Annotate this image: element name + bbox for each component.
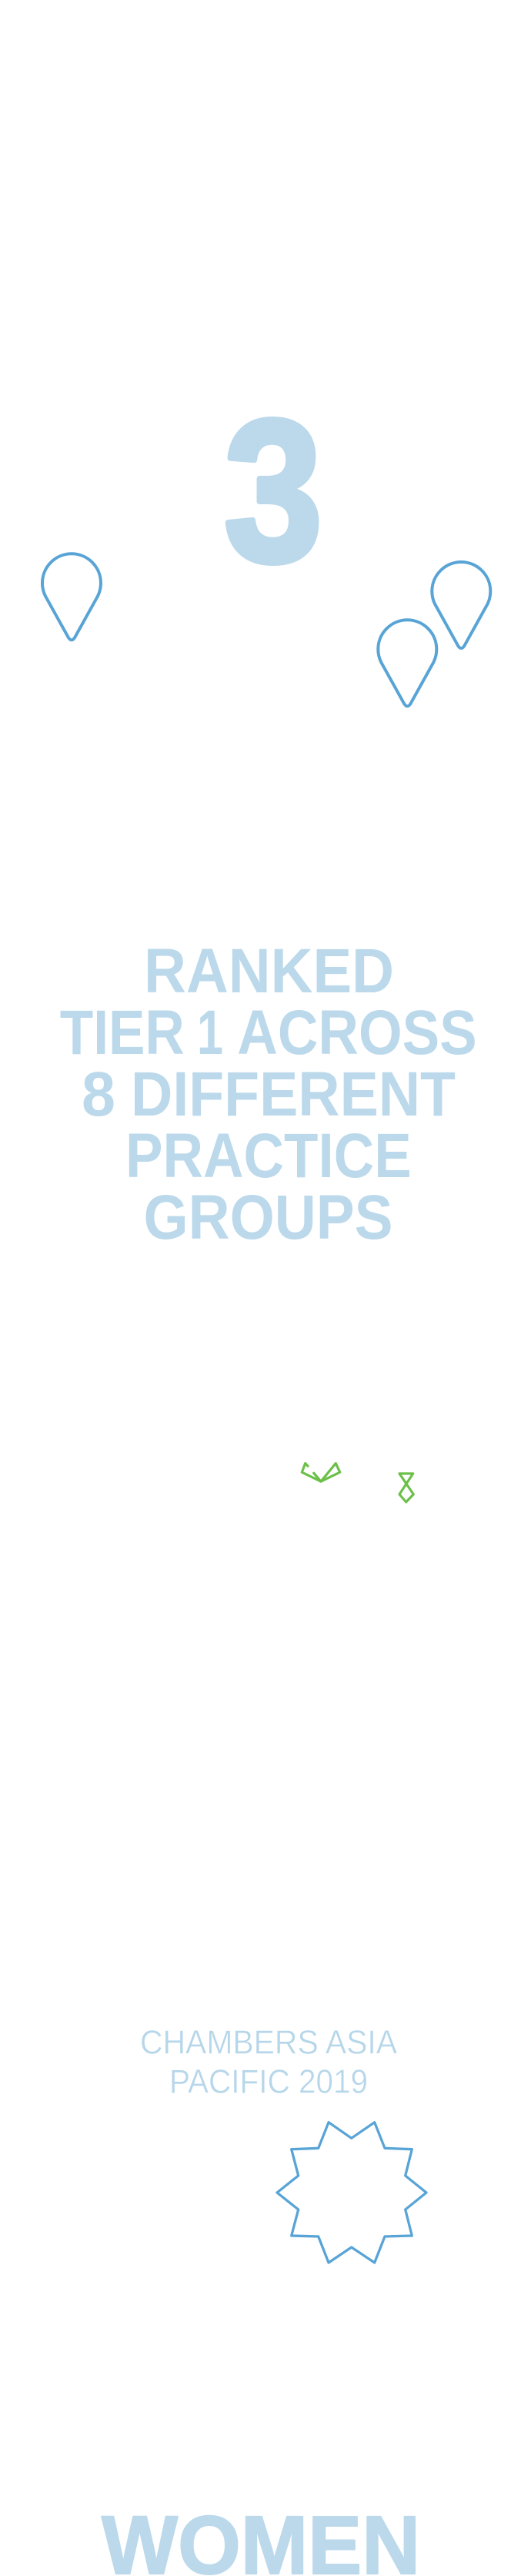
icon: ten point star badge [277, 2123, 426, 2263]
heading: ranked tier 1 across 8 different practice groups: GROUPS [143, 1183, 392, 1253]
icon: map pin left [42, 554, 101, 640]
heading: ranked tier 1 across 8 different practice groups: DIFFERENT [131, 1059, 456, 1129]
text: chambers asia pacific 2019: CHAMBERS ASIA [140, 2025, 397, 2062]
text: chambers asia pacific 2019 [140, 2025, 397, 2100]
heading: ranked tier 1 across 8 different practice groups: ACROSS [237, 998, 477, 1068]
heading: ranked tier 1 across 8 different practice groups: RANKED [144, 936, 394, 1006]
text: chambers asia pacific 2019: PACIFIC 2019 [169, 2063, 368, 2100]
icon: map pin right lower [378, 620, 436, 706]
heading: ranked tier 1 across 8 different practice groups: PRACTICE [125, 1121, 412, 1191]
heading: ranked tier 1 across 8 different practice groups: 1 [197, 998, 223, 1068]
icon: green tie [399, 1474, 413, 1502]
big number 3: 3 [224, 379, 322, 604]
heading: ranked tier 1 across 8 different practice groups: 8 [82, 1059, 115, 1129]
heading: ranked tier 1 across 8 different practice groups: TIER [60, 998, 185, 1068]
heading: ranked tier 1 across 8 different practice groups [60, 936, 477, 1253]
icon: map pin right upper [432, 562, 490, 648]
icon: green collar [302, 1464, 340, 1481]
